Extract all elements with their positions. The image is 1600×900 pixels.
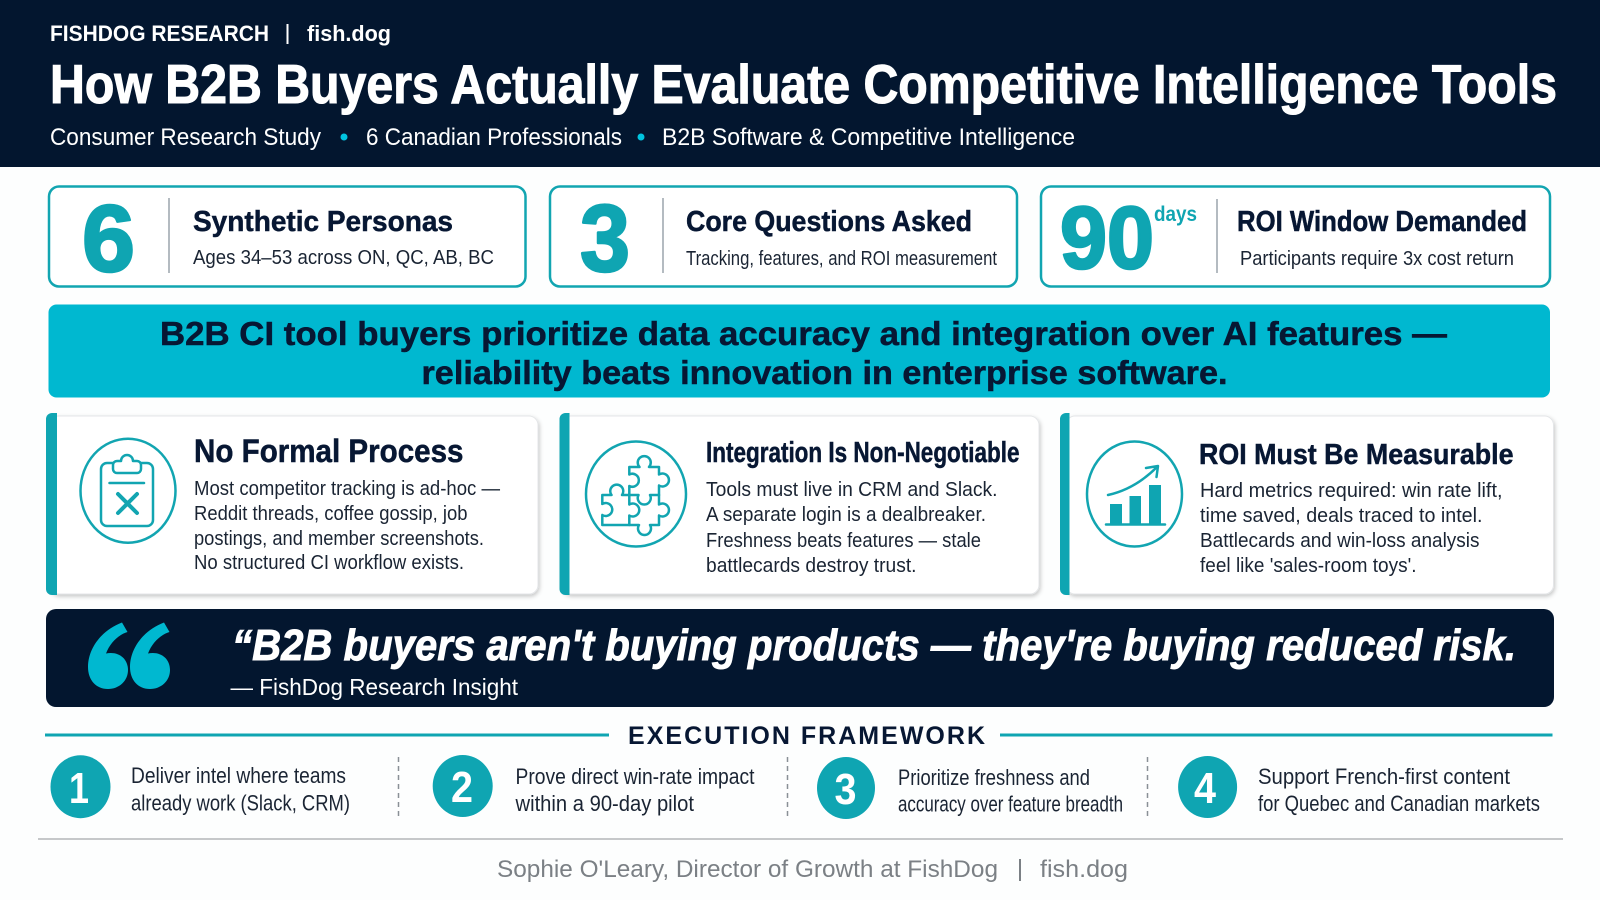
panel body: A separate login is a dealbreaker. bbox=[706, 504, 986, 526]
panel body bbox=[706, 479, 998, 577]
panel body bbox=[1200, 480, 1502, 577]
icon: clipboard with x bbox=[80, 439, 176, 543]
panel body bbox=[194, 478, 500, 574]
stat caption: Ages 34–53 across ON, QC, AB, BC bbox=[193, 247, 494, 269]
brand line: fish.dog bbox=[307, 21, 391, 46]
panel: integration bbox=[560, 413, 1039, 595]
panel: no formal process bbox=[46, 413, 538, 595]
stat caption: Participants require 3x cost return bbox=[1240, 248, 1514, 270]
footer: fish.dog bbox=[1040, 856, 1128, 883]
days unit: days bbox=[1154, 203, 1197, 226]
step 1: Deliver intel where teams bbox=[131, 763, 346, 788]
panel body: Tools must live in CRM and Slack. bbox=[706, 479, 998, 501]
panel body: feel like 'sales-room toys'. bbox=[1200, 555, 1416, 577]
stat caption: Tracking, features, and ROI measurement bbox=[686, 248, 997, 270]
quote text: “B2B buyers aren't buying products — they're buying reduced risk. bbox=[232, 621, 1516, 670]
brand line: FISHDOG RESEARCH bbox=[50, 21, 269, 46]
subtitle: B2B Software & Competitive Intelligence bbox=[662, 124, 1075, 151]
panel heading: No Formal Process bbox=[194, 433, 464, 469]
stat title: Synthetic Personas bbox=[193, 206, 453, 238]
header bbox=[0, 0, 1600, 167]
footer bbox=[38, 838, 1563, 883]
step 3: Prioritize freshness and bbox=[898, 765, 1090, 790]
step 3 bbox=[817, 757, 1123, 819]
step 3: 3 bbox=[834, 765, 856, 814]
quote band bbox=[46, 609, 1554, 707]
icon: puzzle pieces bbox=[586, 442, 686, 546]
section heading: execution framework bbox=[45, 722, 1552, 750]
stat number 6: 6 bbox=[82, 186, 135, 292]
step 4: Support French-first content bbox=[1258, 764, 1510, 789]
footer: Sophie O'Leary, Director of Growth at FishDog bbox=[497, 856, 998, 883]
stat number 3: 3 bbox=[580, 186, 630, 292]
subtitle: 6 Canadian Professionals bbox=[366, 124, 622, 151]
panel: ROI bbox=[1060, 413, 1554, 595]
icon: rising bar chart bbox=[1087, 442, 1182, 546]
step 2: Prove direct win-rate impact bbox=[516, 764, 754, 789]
stat card: synthetic personas bbox=[49, 186, 526, 292]
panel body: Hard metrics required: win rate lift, bbox=[1200, 480, 1502, 502]
panel body: battlecards destroy trust. bbox=[706, 555, 916, 577]
key takeaway banner: B2B CI tool buyers prioritize data accuracy and integration over AI features — bbox=[160, 315, 1447, 352]
section heading: execution framework: EXECUTION FRAMEWORK bbox=[628, 722, 985, 750]
stat card: core questions bbox=[550, 186, 1017, 292]
quote attribution: — FishDog Research Insight bbox=[230, 674, 519, 700]
step 4: for Quebec and Canadian markets bbox=[1258, 791, 1540, 816]
key takeaway banner: reliability beats innovation in enterprise software. bbox=[422, 354, 1228, 391]
panel heading: Integration Is Non-Negotiable bbox=[706, 437, 1020, 469]
panel body: Most competitor tracking is ad-hoc — bbox=[194, 478, 500, 500]
step 1 bbox=[50, 755, 350, 818]
stat title: ROI Window Demanded bbox=[1237, 206, 1527, 238]
stat title: Core Questions Asked bbox=[686, 206, 972, 238]
step 3: accuracy over feature breadth bbox=[898, 792, 1123, 816]
key takeaway banner bbox=[48, 304, 1550, 398]
step 4: 4 bbox=[1194, 764, 1216, 813]
stat card: ROI window bbox=[1041, 186, 1550, 287]
subtitle bbox=[50, 124, 1075, 151]
step 2 bbox=[433, 755, 754, 817]
subtitle: Consumer Research Study bbox=[50, 124, 321, 151]
step 2: within a 90-day pilot bbox=[515, 791, 694, 816]
panel body: Freshness beats features — stale bbox=[706, 530, 981, 552]
panel heading: ROI Must Be Measurable bbox=[1199, 439, 1514, 471]
icon: quotation mark bbox=[88, 622, 170, 689]
brand line bbox=[50, 21, 391, 46]
panel body: No structured CI workflow exists. bbox=[194, 552, 464, 574]
step 2: 2 bbox=[451, 763, 473, 812]
panel body: Reddit threads, coffee gossip, job bbox=[194, 503, 468, 525]
step 1: already work (Slack, CRM) bbox=[131, 790, 350, 816]
stat number 90: 90 bbox=[1060, 188, 1154, 287]
panel body: time saved, deals traced to intel. bbox=[1200, 505, 1482, 527]
step 4 bbox=[1178, 756, 1540, 818]
step 1: 1 bbox=[69, 764, 89, 813]
panel body: postings, and member screenshots. bbox=[194, 528, 484, 550]
panel body: Battlecards and win-loss analysis bbox=[1200, 530, 1480, 552]
